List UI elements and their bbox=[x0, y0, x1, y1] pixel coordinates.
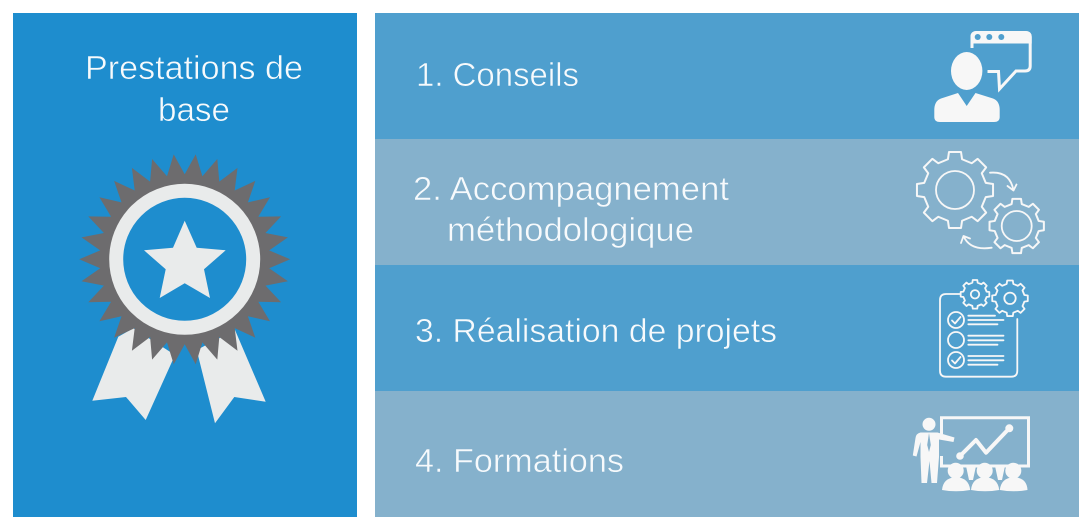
heading: prestations de base: base bbox=[158, 91, 230, 128]
icon: award rosette bbox=[79, 154, 290, 423]
icon: advisor with speech bubble bbox=[934, 31, 1032, 122]
panel: row 3 realisation de projets bbox=[375, 265, 1079, 391]
icon: rotating gears bbox=[917, 152, 1044, 253]
label: conseils: 1. Conseils bbox=[416, 56, 579, 93]
label: formations: 4. Formations bbox=[415, 442, 624, 479]
panel: row 2 accompagnement bbox=[375, 139, 1079, 265]
icon: checklist with gears bbox=[940, 280, 1028, 377]
label: accompagnement methodologique: méthodologique bbox=[447, 211, 694, 248]
icon: trainer with audience bbox=[913, 418, 1028, 491]
panel: row 1 conseils bbox=[375, 13, 1079, 139]
label: realisation de projets: 3. Réalisation de projets bbox=[415, 312, 777, 349]
label: accompagnement methodologique bbox=[413, 170, 729, 248]
heading: prestations de base bbox=[85, 49, 303, 128]
label: accompagnement methodologique: 2. Accompagnement bbox=[413, 170, 729, 207]
panel: row 4 formations bbox=[375, 391, 1079, 517]
heading: prestations de base: Prestations de bbox=[85, 49, 303, 86]
panel: prestations de base bbox=[13, 13, 357, 517]
